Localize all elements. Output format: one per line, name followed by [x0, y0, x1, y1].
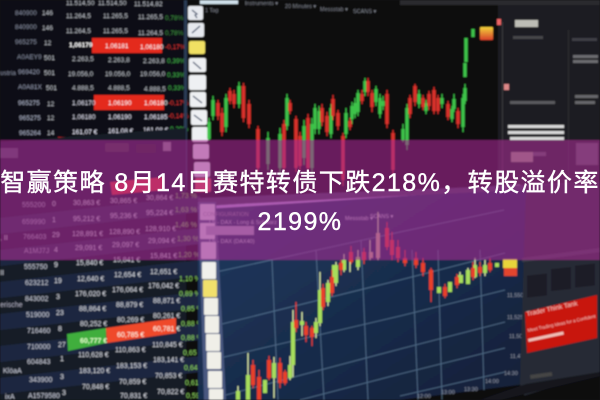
panel: lower-left quote table: 12,654 €	[114, 272, 141, 279]
panel: lower-left quote table: 80,252 €	[80, 321, 107, 328]
panel: top-left quote table: 11.265,5	[103, 13, 128, 20]
panel: top-left quote table: 1,06190	[108, 114, 132, 121]
panel: top-left quote table: 11.514,50	[66, 0, 95, 7]
panel: lower-left quote table: 95,236 €	[110, 213, 137, 220]
panel: lower-left quote table: 110,628 €	[78, 352, 109, 359]
panel: lower-left quote table: 0,64 %	[184, 365, 206, 372]
panel: lower-left quote table: 88,879 €	[116, 302, 143, 309]
panel: top-left quote table: 161,08 €	[108, 128, 134, 135]
red callout: Trader Think Tank	[525, 295, 597, 353]
title: 2199%	[258, 208, 342, 236]
panel: lower-left quote table: 95,212 €	[73, 216, 100, 223]
panel: top-left quote table: 965275	[18, 100, 40, 107]
panel: lower-left quote table: 1,10 %	[179, 276, 201, 283]
panel: top-left quote table	[0, 0, 189, 140]
panel: lower-left quote table: 88,864 €	[79, 306, 106, 313]
panel: lower-left quote table: 176,064 €	[112, 287, 143, 294]
panel: lower chart header: SCANS ▾	[370, 214, 393, 220]
panel: top-left quote table: 501	[44, 55, 55, 62]
panel: top right side panel	[400, 0, 600, 200]
panel: lower-left quote table: 0	[52, 201, 56, 208]
panel: top chart header: SCANS ▾	[353, 9, 376, 15]
panel: lower-left quote table: 1,63 %	[175, 207, 197, 214]
panel: top-left quote table: 969420	[18, 69, 40, 76]
panel: top-left quote table: A0A81X	[18, 84, 43, 91]
panel: lower-left quote table: 110,863 €	[115, 347, 146, 354]
panel: lower-left quote table: 183,120 €	[79, 368, 110, 375]
panel: lower-left quote table: 15,841 €	[113, 257, 140, 264]
axis labels: lower chart: 13:00	[441, 390, 455, 396]
panel: lower-left quote table: 0,65 %	[183, 350, 205, 357]
panel: lower-left quote table: 0,85 %	[181, 306, 203, 313]
panel: top-left quote table: 0,29%	[170, 126, 189, 133]
panel: top-left quote table: 146	[42, 10, 53, 17]
panel: lower-left quote table: A1MJ7J	[24, 248, 49, 255]
panel: lower-left quote table: 0,59 %	[186, 393, 208, 400]
panel: top-left quote table: 2.263,8	[108, 57, 130, 64]
axis labels: lower chart: 11,475	[510, 354, 526, 360]
axis labels: lower chart	[417, 293, 526, 400]
panel: lower-left quote table: 1	[60, 356, 64, 363]
panel: top-left quote table: 11.514,82	[134, 1, 163, 8]
panel: lower-left quote table: 343900	[29, 377, 52, 384]
panel: lower-left quote table: 183,141 €	[153, 357, 184, 364]
title: 智赢策略 8月14日赛特转债下跌218%，转股溢价率	[0, 169, 600, 197]
panel: lower chart header	[203, 212, 393, 245]
panel: lower chart header: LS - DAX - Long & Schwarz	[209, 220, 277, 226]
panel: top-left quote table: 161,07 €	[72, 129, 98, 136]
panel: lower chart header: LS - DAX (DAX40)	[209, 239, 255, 245]
panel: top-left quote table: 965264	[19, 130, 41, 137]
panel: top-left quote table: 12	[44, 40, 52, 47]
title	[0, 169, 600, 236]
axis labels: lower chart: 11,500	[509, 334, 525, 340]
panel: top-left quote table: 840900	[15, 24, 37, 31]
panel: lower-left quote table: 30,864 €	[146, 195, 173, 202]
panel: lower-left quote table: 110,845 €	[152, 342, 183, 349]
panel: top-left quote table: 4.888,5	[144, 86, 166, 93]
panel: top-left quote table: 19.056,0	[105, 71, 131, 78]
panel: top-left quote table: 1,06180	[72, 114, 96, 121]
panel: top-left quote table: 840900	[15, 10, 37, 17]
panel: top-left quote table: 501	[46, 85, 57, 92]
panel: top-left quote table: 11.265,5	[138, 14, 163, 21]
panel: lower-left quote table: 3	[60, 374, 64, 381]
panel: top-left quote table: A0AEY9	[17, 54, 42, 61]
panel: top-left quote table: 0,33%	[168, 85, 187, 92]
panel: lower-left quote table: 555750	[24, 264, 47, 271]
panel: lower-left quote table: 9	[54, 262, 58, 269]
panel: top-left quote table: 4.888,5	[108, 85, 130, 92]
panel: top-left quote table: 11.264,5	[66, 28, 91, 35]
panel: top-left quote table: 146	[42, 25, 53, 32]
panel: lower-left quote table: 95,224 €	[146, 210, 173, 217]
highlighted bid and ask cells	[67, 318, 180, 351]
panel: lower-left quote table: 128,891 €	[72, 231, 103, 238]
panel: lower-left quote table: 659990	[22, 219, 45, 226]
panel: top chart header: 20 Minutes ▾	[285, 4, 316, 10]
panel: lower-left quote table: 80,261 €	[153, 313, 180, 320]
panel: top-left quote table: 4.888,5	[72, 85, 94, 92]
panel: lower-left quote table: 30,863 €	[73, 200, 100, 207]
panel: lower-left quote table: 29,094 €	[148, 238, 175, 245]
panel: top-left quote table: 12	[47, 115, 55, 122]
panel: top-left quote table: 501	[44, 70, 55, 77]
panel: top-left quote table: 12	[47, 101, 55, 108]
panel: lower-left quote table: 23	[56, 310, 64, 317]
panel: lower-left quote table: 8	[58, 326, 62, 333]
panel: top-left quote table: 1,06180	[140, 44, 164, 51]
panel: lower right side panel	[480, 182, 600, 400]
panel: lower-left quote table: 29,091 €	[75, 245, 102, 252]
chart: top candlesticks	[209, 29, 473, 186]
panel: lower-left quote table: 30,865 €	[110, 198, 137, 205]
panel: lower-left quote table: 15,840 €	[76, 260, 103, 267]
panel: top-left quote table: 161,08 €	[143, 127, 169, 134]
panel: lower-left quote table: 12,651 €	[150, 269, 177, 276]
panel: lower-left quote table: 1	[52, 217, 56, 224]
panel: top-left quote table: 1,06181	[105, 43, 129, 50]
panel: lower-left quote table: 604843	[27, 359, 50, 366]
panel: lower-left quote table	[0, 128, 208, 400]
panel: lower-left quote table: 1,20 %	[178, 252, 200, 259]
panel: lower-left quote table: 1,73 %	[175, 193, 197, 200]
panel: lower-left quote table: 27	[58, 342, 66, 349]
panel: lower chart header: CONFIGURATION	[203, 212, 249, 218]
panel: top-left quote table: 2.263,8	[143, 58, 165, 65]
panel: lower-left quote table: 3	[56, 294, 60, 301]
panel: top-left quote table: -0,17%	[165, 44, 186, 51]
panel: lower-left quote table: 80,269 €	[117, 317, 144, 324]
purple translucent band	[0, 140, 600, 260]
panel: top-left quote table: 965275	[19, 115, 41, 122]
panel: top-left quote table: 965275	[15, 39, 37, 46]
panel: lower-left quote table: 0,61 %	[185, 380, 207, 387]
red callout: Trader Think Tank: Trader Think Tank	[526, 300, 579, 318]
panel: top-left quote table: 19.056,0	[68, 71, 94, 78]
price marker: lower chart	[503, 259, 517, 276]
panel: lower-left quote table: 15,841 €	[150, 253, 177, 260]
panel: lower-left quote table: 12,640 €	[77, 276, 104, 283]
panel: top-left quote table: 1,06180	[144, 100, 168, 107]
highlighted bid and ask cells: 60,781 €	[153, 326, 180, 333]
panel: top-left quote table: 1,06190	[108, 100, 132, 107]
panel: lower chart background	[198, 182, 600, 400]
panel: top-left quote table: 11.514,50	[98, 0, 127, 7]
panel: lower-left quote table: 519000	[26, 312, 49, 319]
panel: top-left quote table: 1,06185	[144, 114, 168, 121]
panel: lower-left quote table: 843002	[25, 296, 48, 303]
panel: lower-left quote table: 0,88 %	[181, 335, 203, 342]
panel: lower-left quote table: 70,831 €	[120, 393, 147, 400]
panel: lower-left quote table: 176,042 €	[148, 283, 179, 290]
panel: top-left quote table: 19.056,0	[140, 71, 166, 78]
panel: lower-left quote table: 0,88 %	[181, 321, 203, 328]
panel: lower-left quote table: 29	[52, 232, 60, 239]
price marker: top chart	[480, 27, 493, 40]
panel: lower-left quote table: 1,30 %	[177, 236, 199, 243]
axis labels: lower chart: 14:30	[504, 371, 518, 377]
panel: top-left quote table: 2.263,5	[72, 56, 94, 63]
panel: lower chart header: Messstab ▾	[345, 216, 373, 222]
panel: lower-left quote table: 88,871 €	[153, 298, 180, 305]
panel: top-left quote table: 0,78%	[165, 15, 184, 22]
axis labels: lower chart: 14:00	[485, 379, 499, 385]
red callout: Trader Think Tank: Meet Trading Ideas for a Confident	[527, 314, 597, 333]
panel: lower-left quote table: 4	[54, 247, 58, 254]
panel: top-left quote table: 1,06170	[72, 100, 96, 107]
panel: lower-left quote table: 70,822 €	[157, 389, 184, 396]
panel: top-left quote table: 0,33%	[167, 72, 186, 79]
panel: top-left quote table: 11.264,5	[138, 30, 163, 37]
panel: lower-left quote table: 555200	[22, 202, 45, 209]
panel: lower-left quote table: 1,46 %	[175, 222, 197, 229]
panel: lower-left quote table: 3	[62, 390, 66, 397]
panel: lower-left quote table: 70,853 €	[155, 373, 182, 380]
panel: top-left quote table: -0,17%	[168, 100, 189, 107]
panel: top-left quote table: -0,14%	[168, 113, 189, 120]
highlighted bid and ask cells: 60,785 €	[117, 332, 144, 339]
panel: top chart header	[200, 0, 376, 15]
panel: top-left quote table: 0,78%	[165, 30, 184, 37]
highlighted bid and ask cells: 60,777 €	[80, 338, 107, 345]
panel: top-left quote table: 0,39%	[167, 58, 186, 65]
panel: top chart header: 1 Tag	[205, 8, 218, 14]
panel: top chart header: Instruments ▾	[245, 1, 278, 7]
panel: lower-left quote table: 766403	[23, 234, 46, 241]
panel: top-left quote table: 1,06179	[69, 42, 93, 49]
panel: lower-left quote table: 0,89 %	[179, 291, 201, 298]
axis labels: lower chart: 12:00	[417, 394, 431, 400]
panel: lower-left quote table: 128,910 €	[145, 226, 176, 233]
axis labels: lower chart: 11,550	[507, 293, 523, 299]
panel: top-left quote table: 14	[47, 130, 55, 137]
panel: top-left quote table: 11.265,5	[103, 28, 128, 35]
panel: lower-left quote table: 183,153 €	[116, 363, 147, 370]
icon toolbar: top chart tools	[184, 0, 211, 192]
panel: lower-left quote table: II	[0, 270, 4, 277]
panel: lower-left quote table: 128,890 €	[109, 229, 140, 236]
chart: lower candlesticks	[238, 212, 497, 400]
panel: lower-left quote table: 29,097 €	[112, 242, 139, 249]
panel: lower-left quote table: 710000	[27, 344, 50, 351]
panel: lower-left quote table: 176,020 €	[75, 291, 106, 298]
panel: lower-left quote table: KlöaA	[3, 368, 22, 375]
panel: top-left quote table: ustria	[0, 70, 16, 77]
panel: top chart header: Messstab ▾	[320, 7, 348, 13]
panel: lower-left quote table: 19	[54, 278, 62, 285]
axis labels: lower chart: 13:30	[464, 387, 478, 393]
panel: top-left quote table: 11.264,5	[66, 13, 91, 20]
panel: lower-left quote table: 716460	[27, 328, 50, 335]
axis labels: lower chart: 11,525	[507, 315, 523, 321]
panel: lower-left quote table: 70,859 €	[119, 379, 146, 386]
panel: lower-left quote table: A1579580	[28, 393, 60, 400]
icon toolbar: lower chart tools	[198, 202, 226, 400]
panel: lower-left quote table: 623212	[25, 280, 48, 287]
panel: lower-left quote table: erische	[0, 302, 23, 309]
panel: lower-left quote table: , II	[0, 235, 8, 242]
panel: lower-left quote table: 70,848 €	[82, 384, 109, 391]
